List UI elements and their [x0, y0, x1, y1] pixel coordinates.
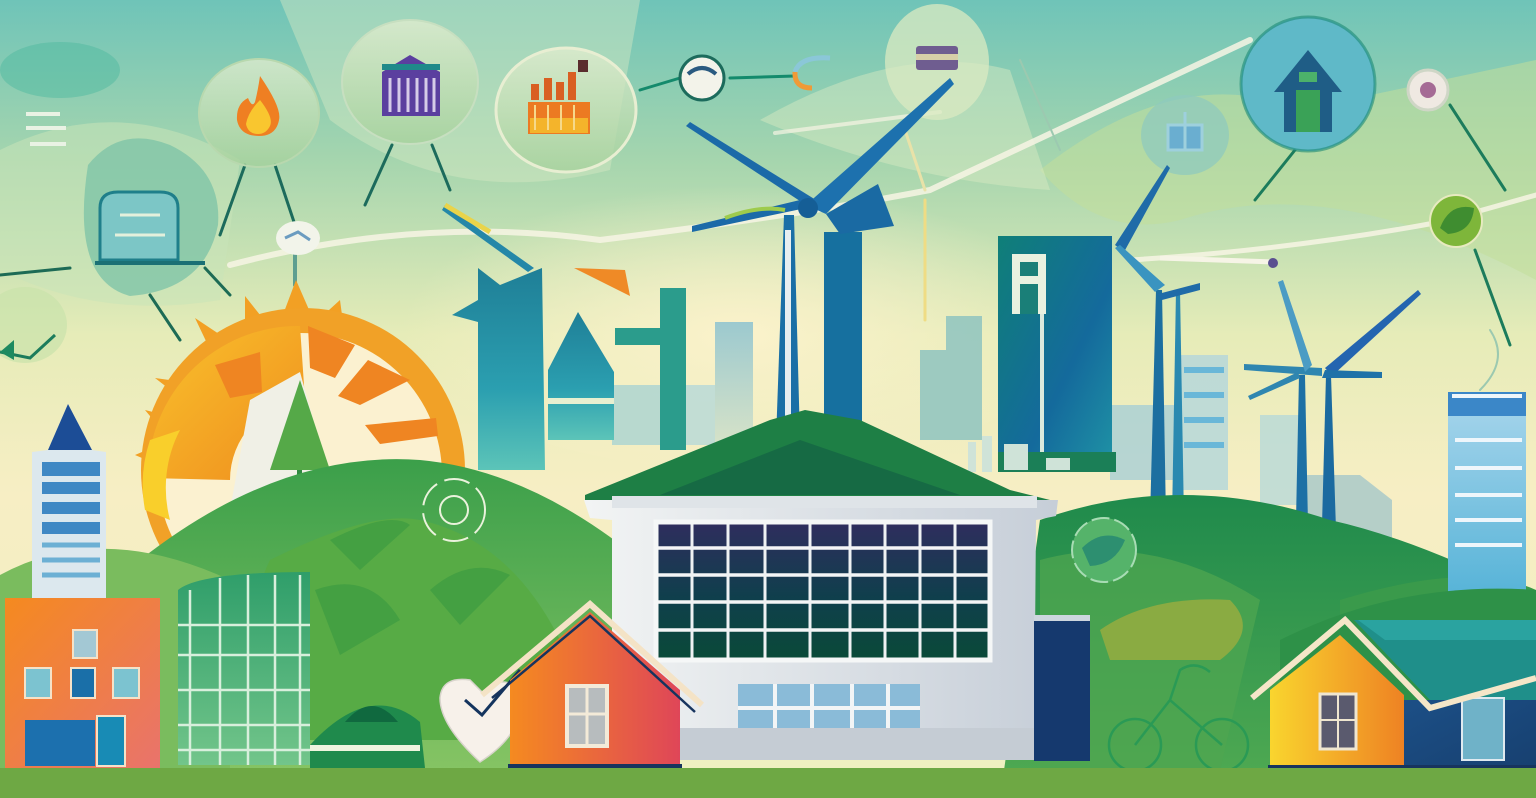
wind turbine: far right: [1244, 280, 1421, 530]
icon: orange teal ring: [795, 58, 830, 88]
icon: node white on line: [276, 221, 320, 255]
icon: green globe: [1072, 518, 1136, 582]
icon: side list lines: [26, 114, 66, 144]
network lines: [0, 40, 1536, 390]
lower window: [738, 684, 920, 738]
hills: [0, 459, 1536, 798]
icon bubble: purple sign: [885, 4, 989, 120]
wind turbine: left blade with orange tip: [442, 205, 630, 296]
main building with solar panel: [584, 496, 1058, 760]
green hill lower right: [1280, 589, 1536, 700]
glass green building: [178, 572, 310, 765]
tower: tall teal right: [998, 236, 1116, 472]
tall building: left blue: [32, 404, 106, 600]
icon bubble: blue house: [1241, 17, 1375, 151]
icon: small node with dash: [680, 56, 724, 100]
skyline: teal towers left: [452, 268, 686, 470]
wind turbine: centre large: [686, 78, 954, 440]
bicycle outline: [1109, 665, 1248, 771]
icon: small network node: [1408, 70, 1448, 110]
icon: green leaf node: [1430, 195, 1482, 247]
icon bubble: flame: [199, 59, 319, 167]
heart icon: [440, 670, 522, 762]
tall building: right blue: [1448, 392, 1526, 592]
solar panel window: [656, 522, 990, 660]
hilltop roof of main building: [585, 410, 1050, 500]
ground strip: [0, 768, 1536, 798]
ring icons on hills: [423, 479, 485, 541]
icon bubble: teal chest: [84, 138, 218, 296]
icon bubble: factory chart: [496, 48, 636, 172]
yellow and blue houses: [1252, 620, 1536, 769]
skyline: pale background buildings: [612, 316, 1392, 570]
icon: left green arrow: [0, 287, 67, 363]
sun with rays: [135, 280, 465, 632]
soft background clouds and sweeps: [0, 0, 1536, 470]
red house: [482, 604, 702, 769]
icon bubble: columned building: [342, 20, 478, 144]
icon bubble: pale blue cross: [1141, 95, 1229, 175]
small shrub building: [310, 706, 425, 768]
wind turbine: right mid: [1115, 165, 1278, 520]
skyline: small pale buildings at tower foot: [968, 436, 1070, 472]
orange building: [5, 598, 160, 768]
navy annex: [1034, 615, 1090, 761]
